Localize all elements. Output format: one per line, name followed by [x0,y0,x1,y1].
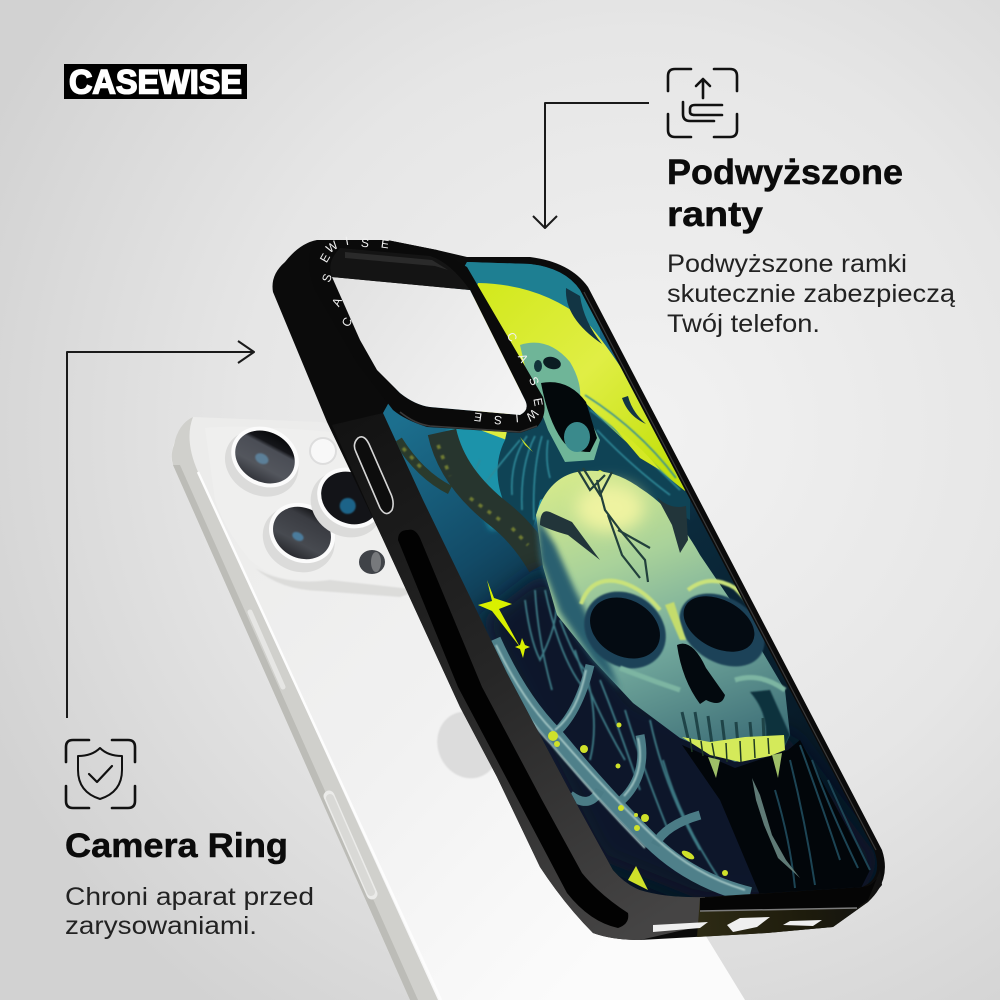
hair strands small skull [475,395,680,520]
pendant [752,778,800,878]
text: camera ring [65,883,314,940]
camera plateau [205,427,425,594]
left ornament [540,511,600,560]
nose bridge [665,602,686,640]
text: camera ring: Chroni aparat przed [65,883,314,911]
lens two [251,490,348,585]
fangs [708,753,782,778]
small skull nose shadow [534,360,542,372]
skull left shadow [536,515,620,690]
case body [272,240,885,940]
logo [64,64,247,102]
thick branch [442,432,542,565]
ring lettering: E [530,397,546,407]
nose [677,644,725,704]
case side band [332,413,705,940]
lens three [298,454,397,550]
phone body [171,417,745,1000]
heading: raised edges: Podwyższone [667,153,903,192]
yellow droplets [548,722,728,890]
volume button [354,437,393,514]
eye socket shade right [678,592,765,668]
ring lettering: E [380,237,390,251]
ring lettering: I [515,411,519,425]
moon [474,283,686,491]
eye socket shade left [584,590,667,670]
ring lettering: S [360,236,370,250]
ring lettering: C [504,330,520,344]
apple logo [426,702,510,788]
bottom black strip [700,878,877,911]
phone left edge [172,417,438,1000]
skull shadow right [750,690,790,750]
ring lettering: A [515,351,531,365]
hair behind small skull [498,392,690,527]
ring lettering: S [493,413,503,427]
top ornament [578,468,650,582]
text: camera ring: zarysowaniami. [65,912,257,940]
ring lower rim [400,412,537,432]
heading: camera ring: Camera Ring [65,827,288,865]
left eye [590,598,660,658]
camera ring [309,234,546,433]
right ornament [657,497,688,553]
mouth [682,740,870,895]
ring lettering: E [317,251,333,265]
small skull eye [543,356,561,370]
flash [310,438,336,464]
teeth [682,735,785,762]
heading: raised edges [667,153,903,234]
bottom band [697,870,882,937]
pale tree branch [553,665,700,845]
crescent top right [566,288,602,344]
text: raised edges [667,250,955,338]
edge inner highlight [198,472,441,1000]
black case [272,240,885,940]
logo box [64,64,247,99]
text: raised edges: skutecznie zabezpieczą [667,280,955,308]
ring lettering [317,234,546,427]
jaw ridges [682,712,764,745]
thin branch [398,440,450,490]
yellow glints in hair [520,425,660,470]
cheek highlights [620,668,785,690]
ring lettering: I [344,234,350,248]
ring lettering: E [473,410,483,424]
side slot [398,530,628,928]
text: raised edges: Twój telefon. [667,310,820,338]
lower side button [329,796,372,894]
arrow: raised edges [533,103,649,228]
arrow: camera ring [67,341,254,718]
ring frame [309,240,545,433]
ports [653,922,708,932]
sensor [359,550,385,574]
artwork on screen [370,250,890,910]
edge outer shade [173,465,418,1000]
small skull [520,343,600,462]
skull dome highlight [576,484,644,532]
text: raised edges: Podwyższone ramki [667,250,907,278]
mid teal sky [445,420,545,530]
ring lettering: S [319,272,335,284]
bottom highlight [700,908,857,911]
upper side button [250,612,283,687]
hair strands mid [525,590,720,880]
dark lower field [480,570,880,900]
white phone [171,414,745,1000]
crescent lower right [622,396,646,424]
small skull tongue [564,422,590,452]
lens one [213,414,312,509]
art background [370,250,890,910]
big skull [536,471,790,762]
ring lettering: A [329,295,345,309]
ring lettering: W [523,406,541,424]
camera cut-out [332,277,527,415]
big star [478,580,520,647]
ring lettering: C [339,315,355,329]
cut-out inner wall [330,248,470,290]
logo wordmark: CASEWISE [69,64,242,102]
icon: shield [66,740,135,808]
ring lettering: S [526,374,542,388]
heading: raised edges: ranty [667,195,764,234]
ring lettering: W [323,238,341,256]
right eye [684,596,754,652]
brow highlights [578,578,744,612]
small star [515,638,530,658]
pale tree trunk [493,640,750,895]
pale tree lines [490,645,745,890]
small skull mouth [541,382,597,452]
top teal sky [465,262,600,338]
branch specks [403,445,528,545]
case rim light [584,292,876,850]
hair strands right [775,745,870,888]
icon: raised edges [668,69,737,137]
